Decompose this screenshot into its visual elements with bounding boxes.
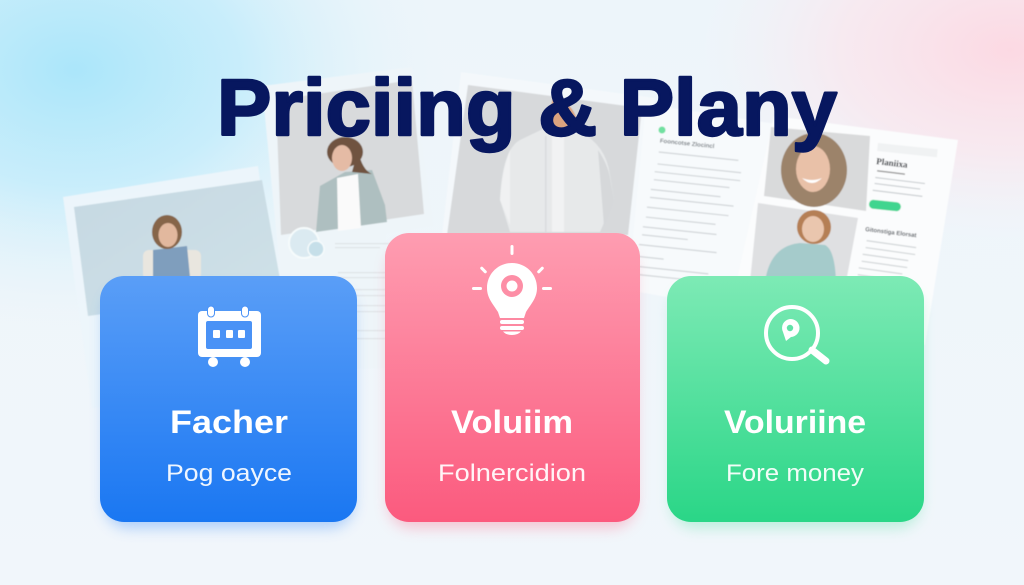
text: Fore money: Fore money <box>726 460 864 487</box>
text: profile heading: Planiixa <box>876 156 909 170</box>
panel: Voluriine <box>667 276 924 528</box>
button: green pill <box>869 199 901 212</box>
text: Folnercidion: Folnercidion <box>438 460 586 487</box>
document: right profile sheet: Gitonstiga Elorsat <box>865 227 917 239</box>
document: second portrait sheet <box>262 67 434 372</box>
icon: lens circles <box>289 228 324 258</box>
title: Priciing & Plany <box>217 63 838 152</box>
heading: Facher: Facher <box>170 404 288 440</box>
text block: article copy <box>634 137 744 285</box>
heading: Voluiim: Voluiim <box>451 404 573 440</box>
panel: Facher <box>100 276 357 528</box>
panel: Voluiim <box>385 233 640 528</box>
icon: light bulb <box>472 245 552 335</box>
icon: calendar <box>198 306 261 367</box>
icon: magnifier <box>766 307 826 361</box>
person: green shirt <box>316 137 387 232</box>
person: curly hair portrait <box>781 133 847 207</box>
person: headless white shirt <box>500 98 614 232</box>
person: left portrait <box>143 215 201 280</box>
text block: article copy: Fooncotse Zlocincl <box>660 139 715 150</box>
document: right profile sheet <box>730 116 958 345</box>
person: short hair portrait <box>765 210 836 282</box>
document: left portrait sheet <box>63 166 290 408</box>
document: central shirt sheet <box>438 72 655 300</box>
text: Pog oayce: Pog oayce <box>166 460 292 487</box>
heading: Voluriine: Voluriine <box>724 404 866 440</box>
document: text column sheet <box>628 104 776 310</box>
